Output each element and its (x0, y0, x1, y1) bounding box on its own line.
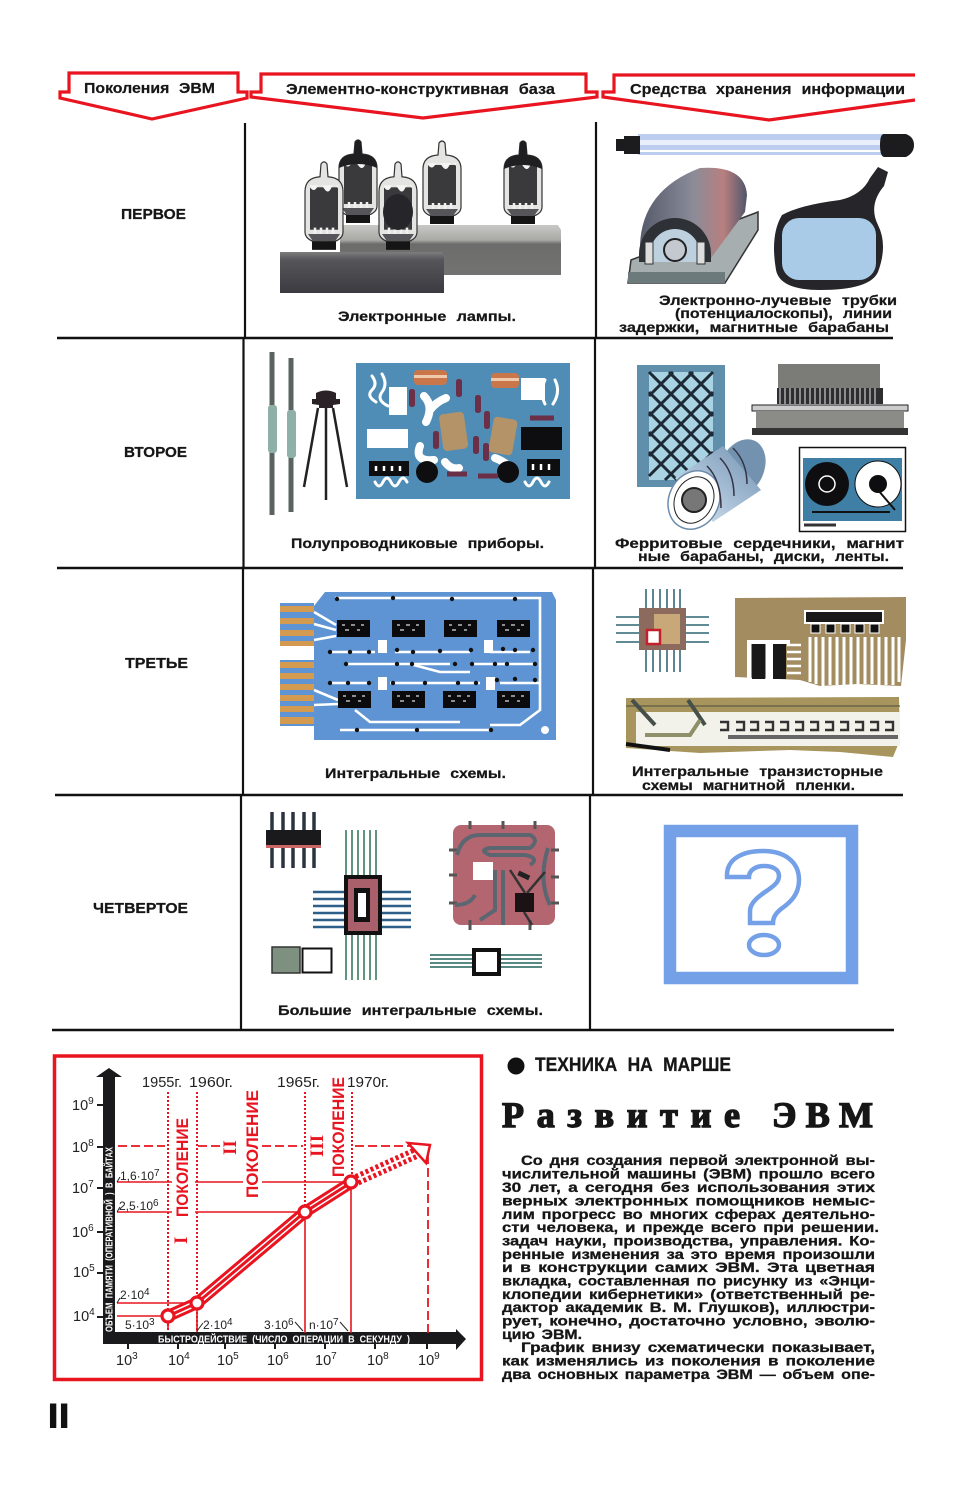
value labels: 7 (333, 1317, 339, 1328)
value labels: 7 (154, 1168, 160, 1179)
article title: ЭВМ (772, 1095, 873, 1135)
caption: vacuum tubes: Электронные лампы. (338, 308, 516, 324)
x axis labels: 5 (233, 1351, 239, 1362)
value labels: n·10 (309, 1318, 333, 1332)
article title: Развитие (502, 1095, 740, 1135)
growth arrow (168, 1143, 430, 1316)
generation labels: ПОКОЛЕНИЕ (243, 1090, 262, 1198)
article body text: задач науки, производства, управления. Ко- (502, 1232, 875, 1248)
year labels: 1955г. (142, 1075, 182, 1091)
x axis labels: 10 (367, 1353, 383, 1369)
header: generations of computers: Поколения ЭВМ (84, 80, 215, 97)
generation labels: ПОКОЛЕНИЕ (329, 1077, 348, 1177)
generation label: third: ТРЕТЬЕ (125, 656, 188, 672)
x axis labels: 8 (383, 1351, 389, 1362)
y axis labels: 10 (72, 1225, 88, 1241)
data points (162, 1176, 357, 1322)
caption: storage of third generation: Интегральные транзисторные (632, 763, 883, 779)
x axis labels: 10 (418, 1353, 434, 1369)
value labels: 6 (153, 1198, 159, 1209)
vertical axis (96, 1068, 122, 1344)
illustration: magnetic disk unit (752, 364, 908, 435)
year labels: 1965г. (277, 1075, 320, 1091)
illustration: vacuum tubes (280, 140, 561, 293)
value labels: 2,5·10 (119, 1199, 153, 1213)
y axis labels: 7 (88, 1179, 94, 1190)
x axis labels: 4 (184, 1351, 190, 1362)
illustration: cathode ray tube (774, 167, 888, 290)
illustration: film transistor strip (626, 697, 900, 757)
guide lines (117, 1092, 428, 1333)
value labels: 4 (227, 1317, 233, 1328)
x axis labels: 7 (331, 1351, 337, 1362)
value labels: 3 (149, 1317, 155, 1328)
illustration: delay line tube (616, 134, 914, 157)
illustration: magnetic drum (628, 168, 758, 283)
value labels: 1,6·10 (120, 1169, 154, 1183)
article body text: вкладка, составленная по рисунку из «Энци- (502, 1272, 875, 1288)
value labels: 5·10 (125, 1318, 149, 1332)
year labels: 1970г. (347, 1075, 389, 1091)
y axis labels (72, 1096, 95, 1325)
illustration: diodes (268, 352, 296, 515)
illustration: transistor (304, 390, 347, 500)
x axis labels (116, 1351, 440, 1369)
caption: storage of first generation: задержки, магнитные барабаны (619, 319, 889, 335)
y axis labels: 6 (88, 1223, 94, 1234)
page number: II (47, 1397, 69, 1436)
header: information storage (603, 75, 915, 120)
article body text: 30 лет, а сегодня без использования этих (502, 1179, 875, 1195)
article body text: сти человека, и прежде всего при решении. (502, 1219, 879, 1235)
value labels: 3·10 (264, 1318, 288, 1332)
illustration: ferrite core plane (637, 365, 725, 487)
article body text: рует, конечно, достаточно условно, эволю- (502, 1312, 875, 1328)
caption: storage of third generation (632, 763, 883, 793)
caption: semiconductors: Полупроводниковые приборы. (291, 535, 544, 551)
y axis labels: 10 (73, 1265, 89, 1281)
article body text: числительной машины (ЭВМ) прошло всего (502, 1166, 875, 1182)
article body text: График внизу схематически показывает, (521, 1339, 875, 1355)
value labels (117, 1168, 348, 1332)
year labels: 1960г. (189, 1075, 233, 1091)
generation labels: III (307, 1135, 328, 1157)
illustration: magnetic drum roll (659, 432, 775, 538)
value labels: 4 (144, 1287, 150, 1298)
icon: question mark (727, 851, 799, 955)
caption: storage of third generation: схемы магнитной пленки. (642, 777, 855, 793)
generation label: first: ПЕРВОЕ (121, 207, 186, 223)
caption: storage of second generation: Ферритовые сердечники, магнит (615, 535, 904, 551)
article body text: Со дня создания первой электронной вы- (521, 1152, 875, 1168)
article body text: два основных параметра ЭВМ — объем опе- (502, 1366, 875, 1382)
horizontal axis (103, 1329, 466, 1350)
question mark box (670, 831, 852, 978)
y axis labels: 10 (72, 1181, 88, 1197)
article body text: как изменялись из поколения в поколение (502, 1352, 875, 1368)
illustration: magnetic film pattern (735, 597, 906, 686)
illustration: small die pair (272, 947, 332, 973)
header: generations of computers (60, 73, 247, 119)
x axis labels: 6 (283, 1351, 289, 1362)
year labels (142, 1075, 389, 1091)
value labels: 2·10 (120, 1288, 144, 1302)
illustration: thin film chip (616, 589, 709, 672)
illustration: small chip with leads (430, 950, 542, 974)
y axis labels: 9 (88, 1096, 94, 1107)
caption: storage of second generation: ные барабаны, диски, ленты. (638, 548, 889, 564)
article body text: дактор академик В. М. Глушков), иллюстри- (502, 1299, 875, 1315)
illustration: tape recorder (800, 448, 906, 532)
value labels: 6 (288, 1317, 294, 1328)
x axis labels: 3 (132, 1351, 138, 1362)
value labels: 2·10 (203, 1318, 227, 1332)
horizontal axis: БЫСТРОДЕЙСТВИЕ (ЧИСЛО ОПЕРАЦИИ В СЕКУНДУ ) (158, 1332, 410, 1346)
vertical axis: ОБЪЕМ ПАМЯТИ (ОПЕРАТИВНОЙ ) В БАЙТАХ (102, 1147, 116, 1332)
y axis labels: 8 (88, 1138, 94, 1149)
article body text (502, 1152, 879, 1382)
x axis labels: 10 (168, 1353, 184, 1369)
x axis labels: 10 (267, 1353, 283, 1369)
x axis labels: 10 (116, 1353, 132, 1369)
line chart: performance and memory by generation (54, 1056, 482, 1380)
header: element base: Элементно-конструктивная база (286, 81, 556, 98)
table grid lines (52, 122, 903, 1030)
illustration: pin connector (266, 812, 321, 868)
caption: storage of second generation (615, 535, 904, 564)
article body text: цию ЭВМ. (502, 1326, 582, 1342)
y axis labels: 4 (89, 1307, 95, 1318)
caption: large scale integrated circuits: Большие интегральные схемы. (278, 1002, 543, 1018)
generation label: fourth: ЧЕТВЕРТОЕ (93, 901, 188, 917)
generation label: second: ВТОРОЕ (124, 445, 187, 461)
rubric heading: ТЕХНИКА НА МАРШЕ (535, 1055, 731, 1076)
illustration: circuit board with discrete components (356, 363, 570, 499)
header: information storage: Средства хранения информации (630, 81, 905, 98)
x axis labels: 10 (217, 1353, 233, 1369)
generation labels: ПОКОЛЕНИЕ (173, 1118, 192, 1217)
caption: integrated circuits: Интегральные схемы. (325, 765, 506, 781)
caption: storage of first generation: (потенциалоскопы), линии (675, 305, 892, 321)
y axis labels: 5 (89, 1263, 95, 1274)
y axis labels: 10 (72, 1140, 88, 1156)
generation labels (171, 1077, 348, 1244)
caption: storage of first generation (619, 292, 897, 335)
caption: storage of first generation: Электронно-лучевые трубки (659, 292, 897, 308)
x axis labels: 10 (315, 1353, 331, 1369)
y axis labels: 10 (73, 1309, 89, 1325)
article body text: ренные изменения за это время произошли (502, 1246, 875, 1262)
y axis labels: 10 (72, 1098, 88, 1114)
generation labels: I (171, 1237, 192, 1244)
header: element base (251, 74, 597, 118)
generation labels: II (220, 1140, 241, 1155)
illustration: integrated circuit board (280, 592, 556, 740)
article body text: клопедии кибернетики» (ответственный ре- (502, 1286, 875, 1302)
article body text: и в конструкции самих ЭВМ. Эта цветная (502, 1259, 875, 1275)
article title (502, 1095, 873, 1135)
x axis labels: 9 (434, 1351, 440, 1362)
illustration: large scale integrated chip (313, 830, 411, 980)
article body text: лим прогресс во многих сферах деятельно- (502, 1206, 875, 1222)
illustration: pink hybrid circuit (449, 821, 559, 930)
article body text: верных электронных помощников немыс- (502, 1192, 875, 1208)
